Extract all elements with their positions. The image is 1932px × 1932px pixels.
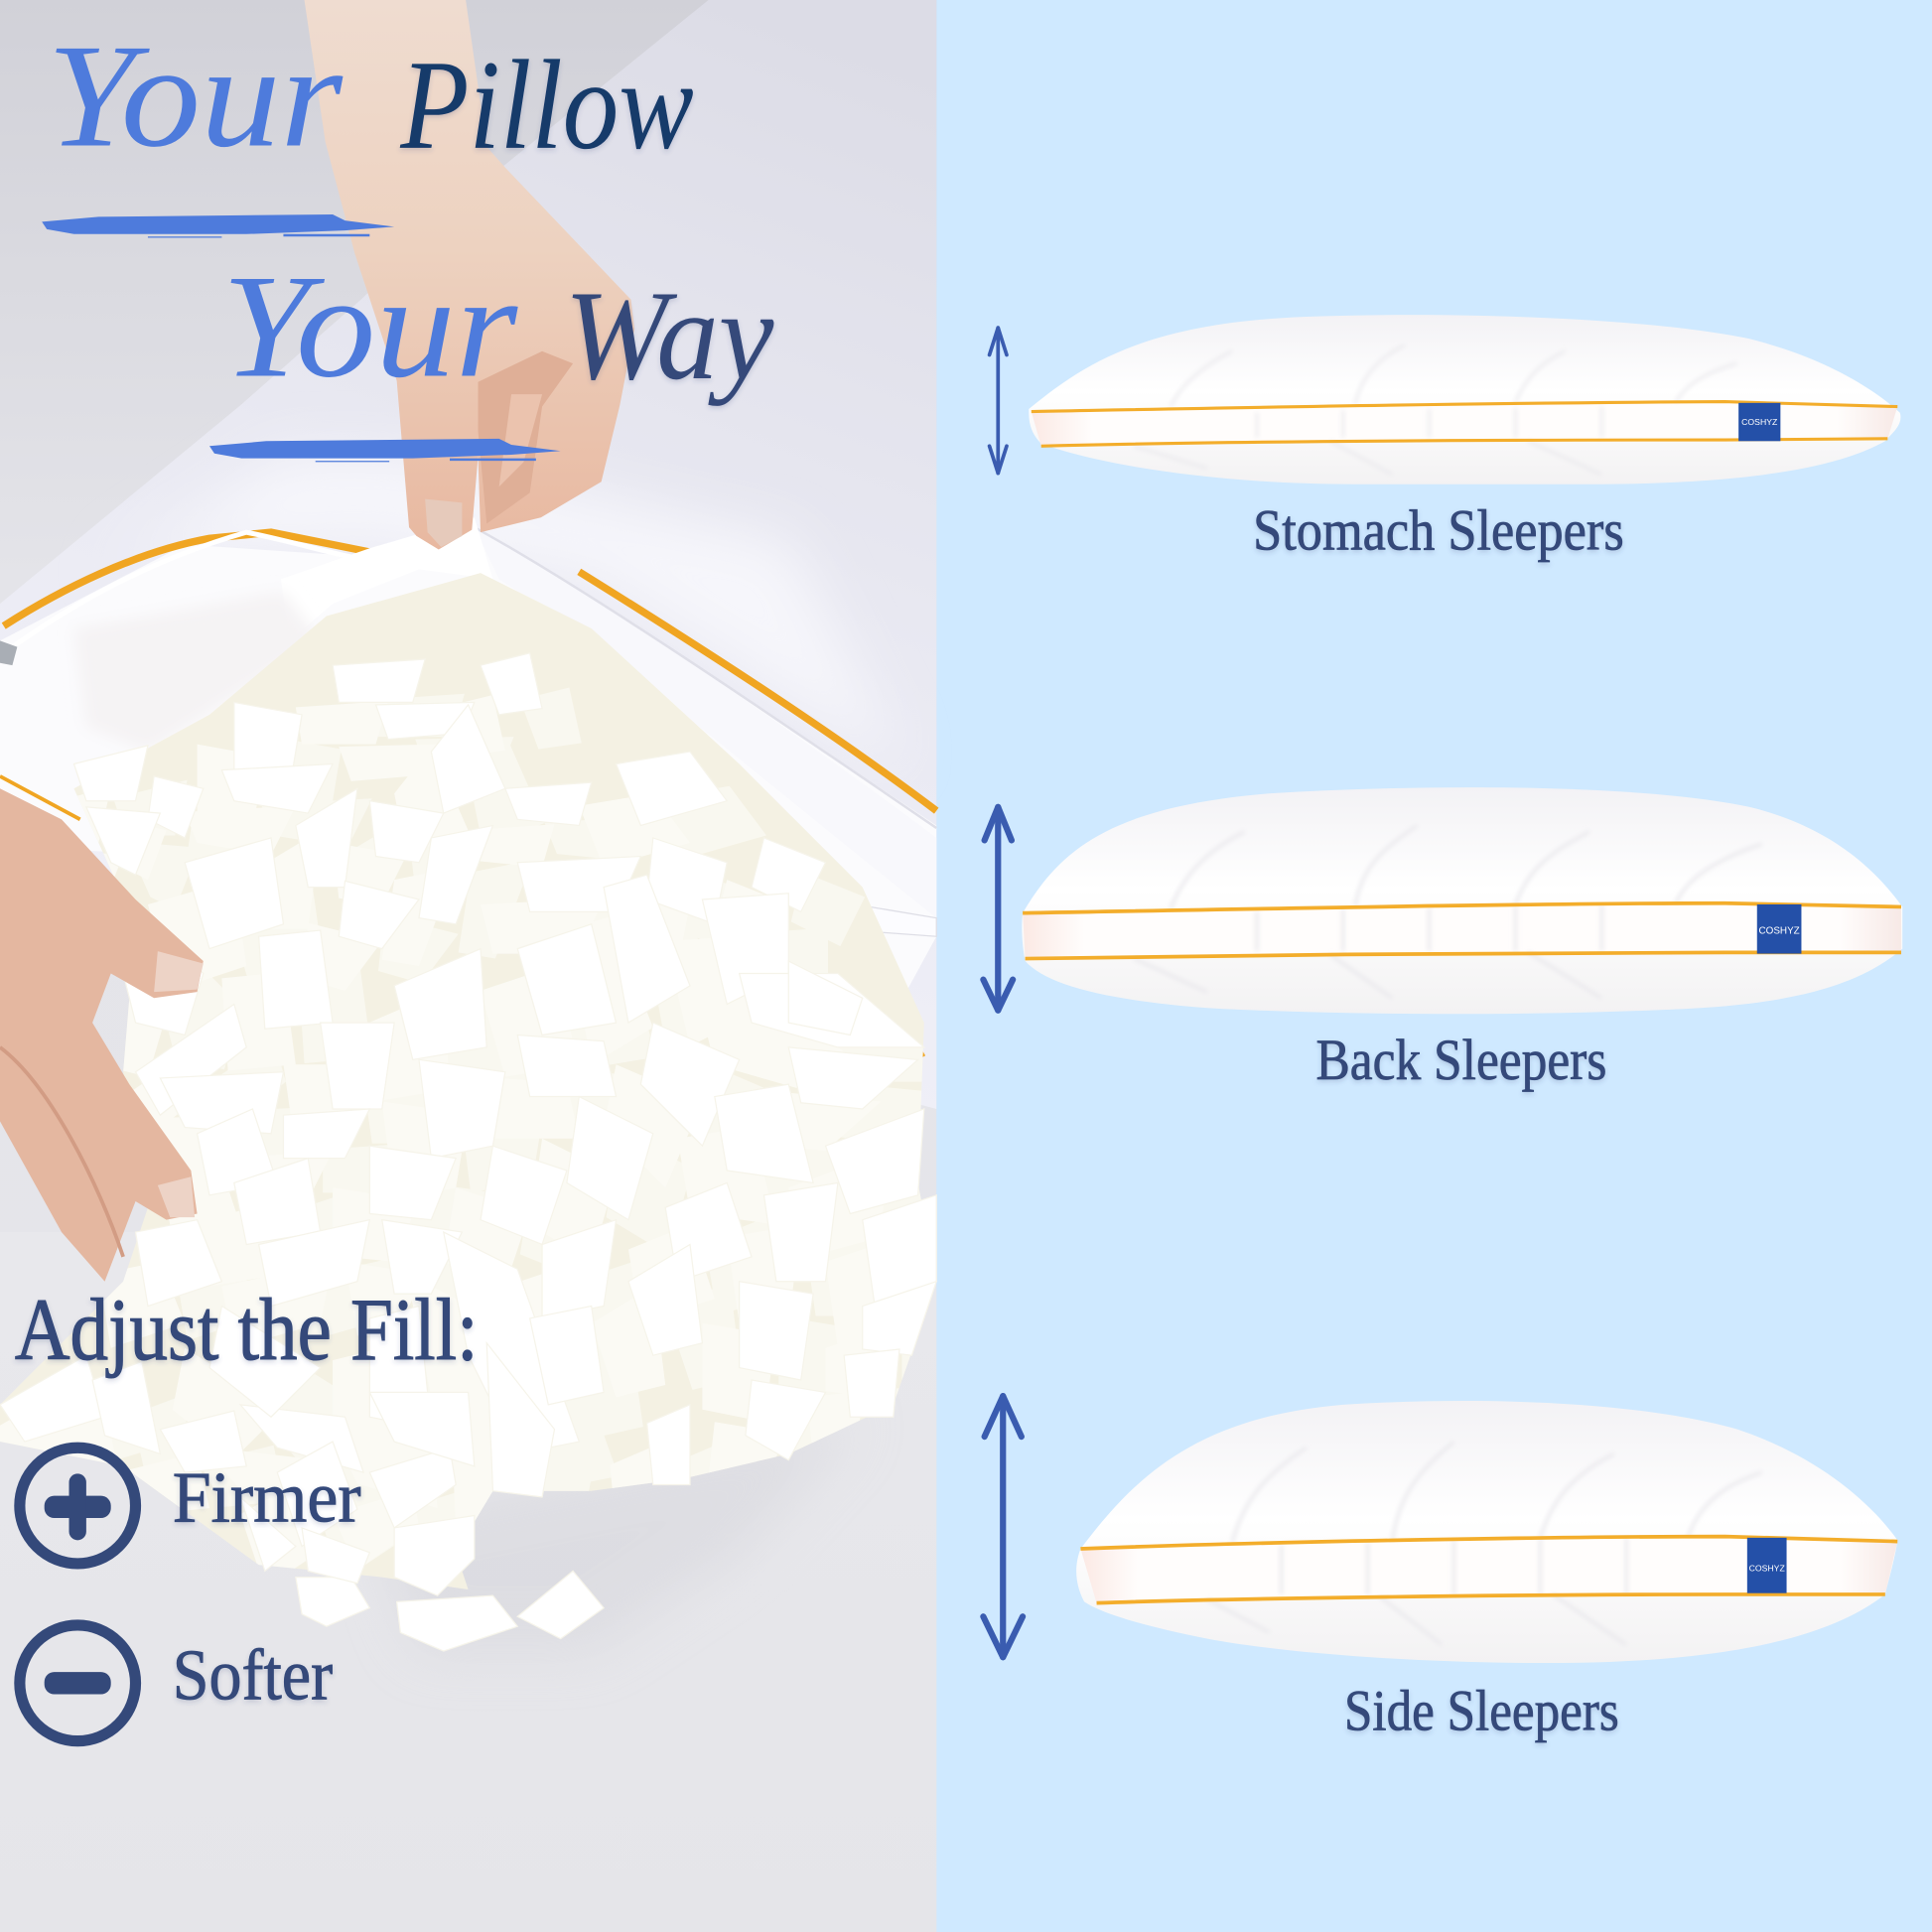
pillow: stomach sleepers bbox=[1029, 315, 1900, 484]
finger shadows bbox=[479, 351, 573, 523]
hand: left bbox=[0, 788, 204, 1282]
panel: right background bbox=[936, 0, 1932, 1932]
icon: plus bbox=[20, 1448, 136, 1564]
shadow under foam bbox=[369, 1417, 863, 1651]
orange piping right bbox=[579, 572, 936, 811]
orange piping left bbox=[4, 532, 369, 625]
thumbnail bbox=[425, 499, 462, 547]
pillow body bbox=[0, 0, 936, 1109]
foam chunks bbox=[0, 653, 936, 1651]
pillow: stomach sleepers: COSHYZ bbox=[1741, 417, 1778, 427]
arrow: stomach height bbox=[990, 328, 1007, 474]
title bbox=[42, 14, 774, 462]
zipper band bottom bbox=[788, 894, 936, 936]
icon: minus bbox=[20, 1625, 136, 1741]
pillow: side sleepers bbox=[1076, 1401, 1897, 1663]
arrow: side height bbox=[983, 1396, 1023, 1657]
panel: product photo bbox=[0, 0, 936, 1932]
flap bbox=[281, 517, 492, 640]
zipper tape right bbox=[475, 527, 936, 918]
thumbnail bbox=[154, 951, 204, 992]
hand: top, pulling zipper bbox=[305, 0, 634, 550]
title word: Pillow: Pillow bbox=[399, 34, 694, 176]
orange bits bbox=[0, 776, 80, 819]
label: back sleepers: Back Sleepers bbox=[1315, 1028, 1606, 1092]
floor under the foam bbox=[0, 1232, 936, 1932]
label: stomach sleepers: Stomach Sleepers bbox=[1253, 498, 1624, 563]
label: softer: Softer bbox=[173, 1634, 333, 1715]
opening fabric bbox=[0, 527, 936, 1072]
pillow: back sleepers bbox=[1022, 787, 1902, 1014]
title word: Way: Way bbox=[564, 264, 774, 406]
foam pile bbox=[0, 573, 976, 1651]
zip pull bbox=[283, 640, 323, 696]
label: side sleepers: Side Sleepers bbox=[1344, 1678, 1619, 1742]
arrow: back height bbox=[983, 807, 1013, 1011]
brush underline 1 bbox=[42, 214, 394, 238]
pillow: side sleepers: COSHYZ bbox=[1749, 1563, 1785, 1573]
heading: adjust the fill: Adjust the Fill: bbox=[15, 1281, 479, 1379]
pillow: back sleepers: COSHYZ bbox=[1758, 926, 1800, 937]
pillow highlight bbox=[98, 456, 899, 763]
brush underline 2 bbox=[209, 439, 561, 462]
title word: Your: Your bbox=[47, 14, 344, 178]
zipper left bbox=[12, 532, 369, 647]
foam under layers bbox=[0, 688, 976, 1588]
foam base bbox=[0, 573, 936, 1589]
label: firmer: Firmer bbox=[173, 1457, 361, 1538]
interior shadow bbox=[73, 592, 321, 752]
fingernail bbox=[158, 1176, 195, 1217]
title word: Your 2: Your bbox=[221, 245, 518, 409]
